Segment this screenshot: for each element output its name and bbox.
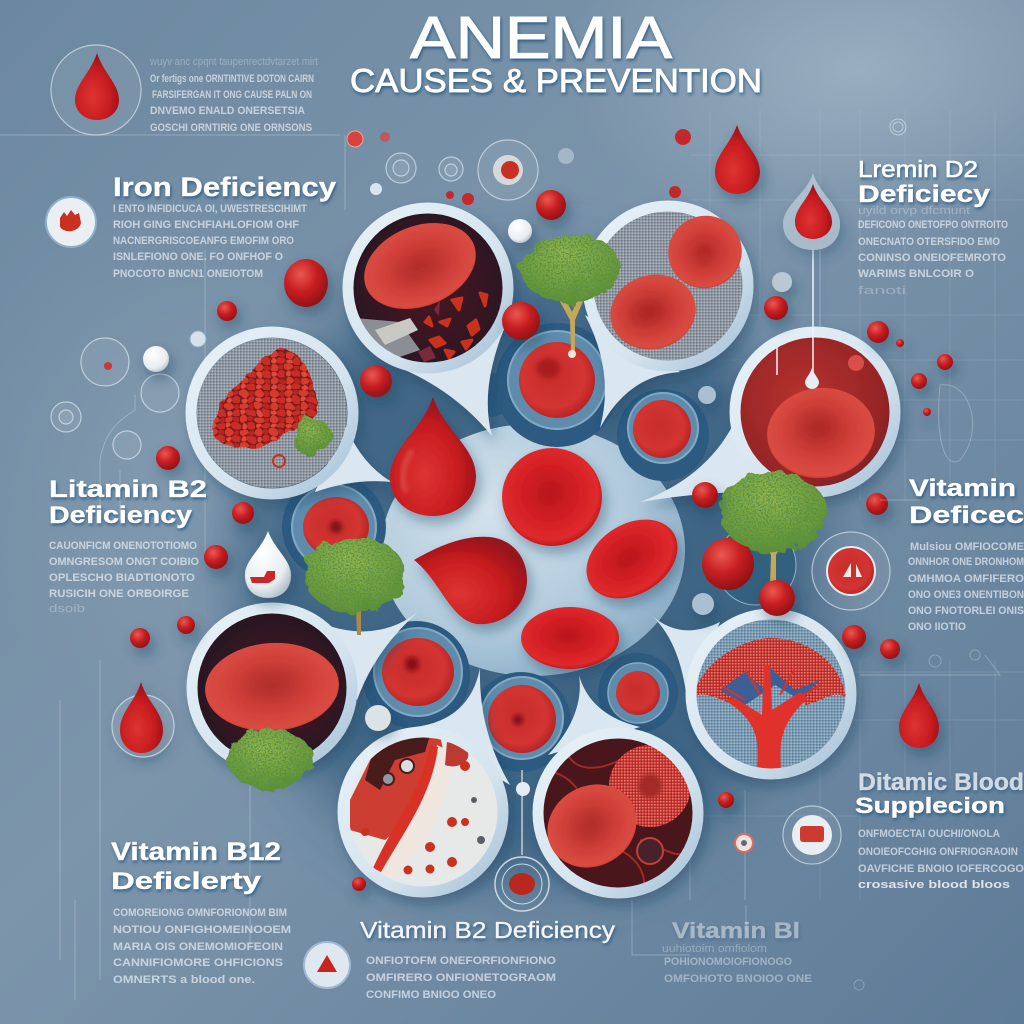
panel: top-left drop note: GOSCHI ORNTIRIG ONE ORNSONS xyxy=(150,122,312,134)
faint text block: bottom right: OMFOHOTO BNOIOO ONE xyxy=(664,973,812,985)
title xyxy=(350,5,762,99)
panel: top-left drop note: FARSIFERGAN IT ONG CAUSE PALN ON xyxy=(152,89,312,101)
panel: vitamin deficiency right: Mulsiou OMFIOCOME xyxy=(910,541,1024,553)
panel: top-left drop note: Or fertigs one ORNTINTIVE DOTON CAIRN xyxy=(150,73,314,85)
panel: vitamin B12 deficiency: MARIA OIS ONEMOMIOFEOIN xyxy=(113,941,283,953)
small lenses xyxy=(292,331,796,759)
panel: vitamin B2 deficiency bottom: CONFIMO BNIOO ONEO xyxy=(366,989,496,1001)
panel: lremin D2 deficiency: Deficiecy xyxy=(858,181,991,208)
icon: bottom circular cell badge xyxy=(495,770,549,911)
small line icons: upper left xyxy=(51,331,206,520)
panel: litamin B2 deficiency: OMNGRESOM ONGT COIBIO xyxy=(49,556,199,568)
lens: bottom left artery xyxy=(340,668,510,895)
icon: circled red badge right xyxy=(812,532,890,610)
lens: red vascular tree xyxy=(650,614,855,780)
panel: vitamin deficiency right: OMHMOA OMFIFERO xyxy=(908,573,1024,585)
panel: top-left drop note: wuyv anc cpqnt taupenrectdvtarzet mirt xyxy=(149,56,318,68)
lens: bottom right cell xyxy=(532,675,705,900)
panel: vitamin B12 deficiency: CANNIFIOMORE OHFICIONS xyxy=(113,957,283,969)
faint text block: bottom right xyxy=(662,918,812,985)
central disc xyxy=(381,424,685,676)
panel: vitamin deficiency right: Deficec xyxy=(909,502,1024,529)
panel: ditamic blood supplecion xyxy=(855,769,1024,891)
panel: iron deficiency: ISNLEFIONO ONE. FO ONFHOF O xyxy=(113,251,283,263)
panel: vitamin B12 deficiency: OMNERTS a blood one. xyxy=(113,974,255,986)
panel: litamin B2 deficiency: OPLESCHO BIADTIONOTO xyxy=(49,572,195,584)
central red blood cells and drop xyxy=(390,397,692,669)
panel: iron deficiency: RIOH GING ENCHFIAHLOFIOM OHF xyxy=(113,219,299,231)
dark pockets behind small lenses xyxy=(282,323,709,772)
panel: vitamin deficiency right: ONO IIOTIO xyxy=(908,621,966,633)
panel: litamin B2 deficiency: RUSICIH ONE ORBOIRGE xyxy=(49,588,189,600)
title: CAUSES & PREVENTION xyxy=(350,62,762,99)
panel: vitamin deficiency right xyxy=(908,475,1024,633)
panel: litamin B2 deficiency: Litamin B2 xyxy=(49,476,207,503)
lens: top left xyxy=(340,200,520,436)
title: ANEMIA xyxy=(410,5,673,71)
panel: ditamic blood supplecion: Supplecion xyxy=(855,793,1005,818)
panel: lremin D2 deficiency xyxy=(858,156,1008,297)
faint text block: bottom right: Vitamin Bl xyxy=(672,918,800,943)
panel: vitamin B12 deficiency: NOTIOU ONFIGHOMEINOOEM xyxy=(113,924,291,936)
panel: iron deficiency xyxy=(46,172,336,280)
panel: iron deficiency: I ENTO INFIDICUCA OI, UWESTRESCIHIMT xyxy=(113,203,307,215)
panel: lremin D2 deficiency: WARIMS BNLCOIR O xyxy=(858,268,974,280)
panel: top-left drop note: DNVEMO ENALD ONERSETSIA xyxy=(150,105,305,117)
panel: vitamin B2 deficiency bottom: OMFIRERO ONFIONETOGRAOM xyxy=(366,972,556,984)
faint text block: bottom right: uuhiotoim omfiolom xyxy=(662,943,767,955)
icon: supplement badge xyxy=(783,806,841,864)
panel: vitamin B12 deficiency: COMOREIONG OMNFORIONOM BIM xyxy=(113,907,287,919)
panel: ditamic blood supplecion: crosasive blood bloos xyxy=(858,879,1010,891)
panel: lremin D2 deficiency: ONECNATO OTERSFIDO EMO xyxy=(858,236,1000,248)
panel: lremin D2 deficiency: uyild orvp dfcmunt xyxy=(858,205,970,217)
panel: litamin B2 deficiency: dsoib xyxy=(49,603,85,615)
small swirl icons: top centre xyxy=(347,119,906,205)
panel: iron deficiency: NACNERGRISCOEANFG EMOFIM ORO xyxy=(113,235,294,247)
panel: vitamin B12 deficiency: Vitamin B12 xyxy=(111,838,281,866)
panel: top-left drop note xyxy=(51,45,318,135)
icon: small target xyxy=(735,834,753,852)
panel: ditamic blood supplecion: ONFMOECTAI OUCHI/ONOLA xyxy=(858,828,1000,840)
white drop xyxy=(245,531,291,598)
large drops xyxy=(112,125,939,757)
red and white spheres xyxy=(130,190,953,891)
panel: ditamic blood supplecion: OAVFICHE BNOIO IOFERCOGO xyxy=(858,863,1024,875)
panel: litamin B2 deficiency xyxy=(49,476,207,615)
panel: litamin B2 deficiency: Deficiency xyxy=(49,502,193,529)
panel: lremin D2 deficiency: CONINSO ONEIOFEMROTO xyxy=(858,252,1006,264)
panel: vitamin deficiency right: Vitamin xyxy=(909,475,1016,502)
lens: left liver xyxy=(190,330,392,500)
panel: ditamic blood supplecion: Ditamic Blood xyxy=(858,769,1024,796)
panel: lremin D2 deficiency: Lremin D2 xyxy=(858,156,978,182)
faint text block: bottom right: POHIONOMOIOFIONOGO xyxy=(664,956,792,968)
red marks on white drop xyxy=(250,571,275,583)
panel: vitamin B2 deficiency bottom: Vitamin B2 Deficiency xyxy=(360,917,616,943)
panel: vitamin B2 deficiency bottom xyxy=(360,917,616,1001)
trees xyxy=(227,233,827,789)
panel: iron deficiency: Iron Deficiency xyxy=(113,172,336,202)
panel: iron deficiency: PNOCOTO BNCN1 ONEIOTOM xyxy=(113,268,263,280)
panel: vitamin B2 deficiency bottom: ONFIOTOFM ONEFORFIONFIONO xyxy=(366,955,556,967)
panel: vitamin B12 deficiency xyxy=(111,838,350,988)
panel: vitamin B12 deficiency: Deficlerty xyxy=(111,868,262,895)
panel: litamin B2 deficiency: CAUONFICM ONENOTOTIOMO xyxy=(49,540,197,552)
lens: top right xyxy=(585,202,755,428)
lens: lower left xyxy=(190,608,418,770)
panel: lremin D2 deficiency: fanoti xyxy=(858,285,906,297)
right side connector lines and small icons xyxy=(746,385,1000,990)
lens: right xyxy=(640,250,900,502)
